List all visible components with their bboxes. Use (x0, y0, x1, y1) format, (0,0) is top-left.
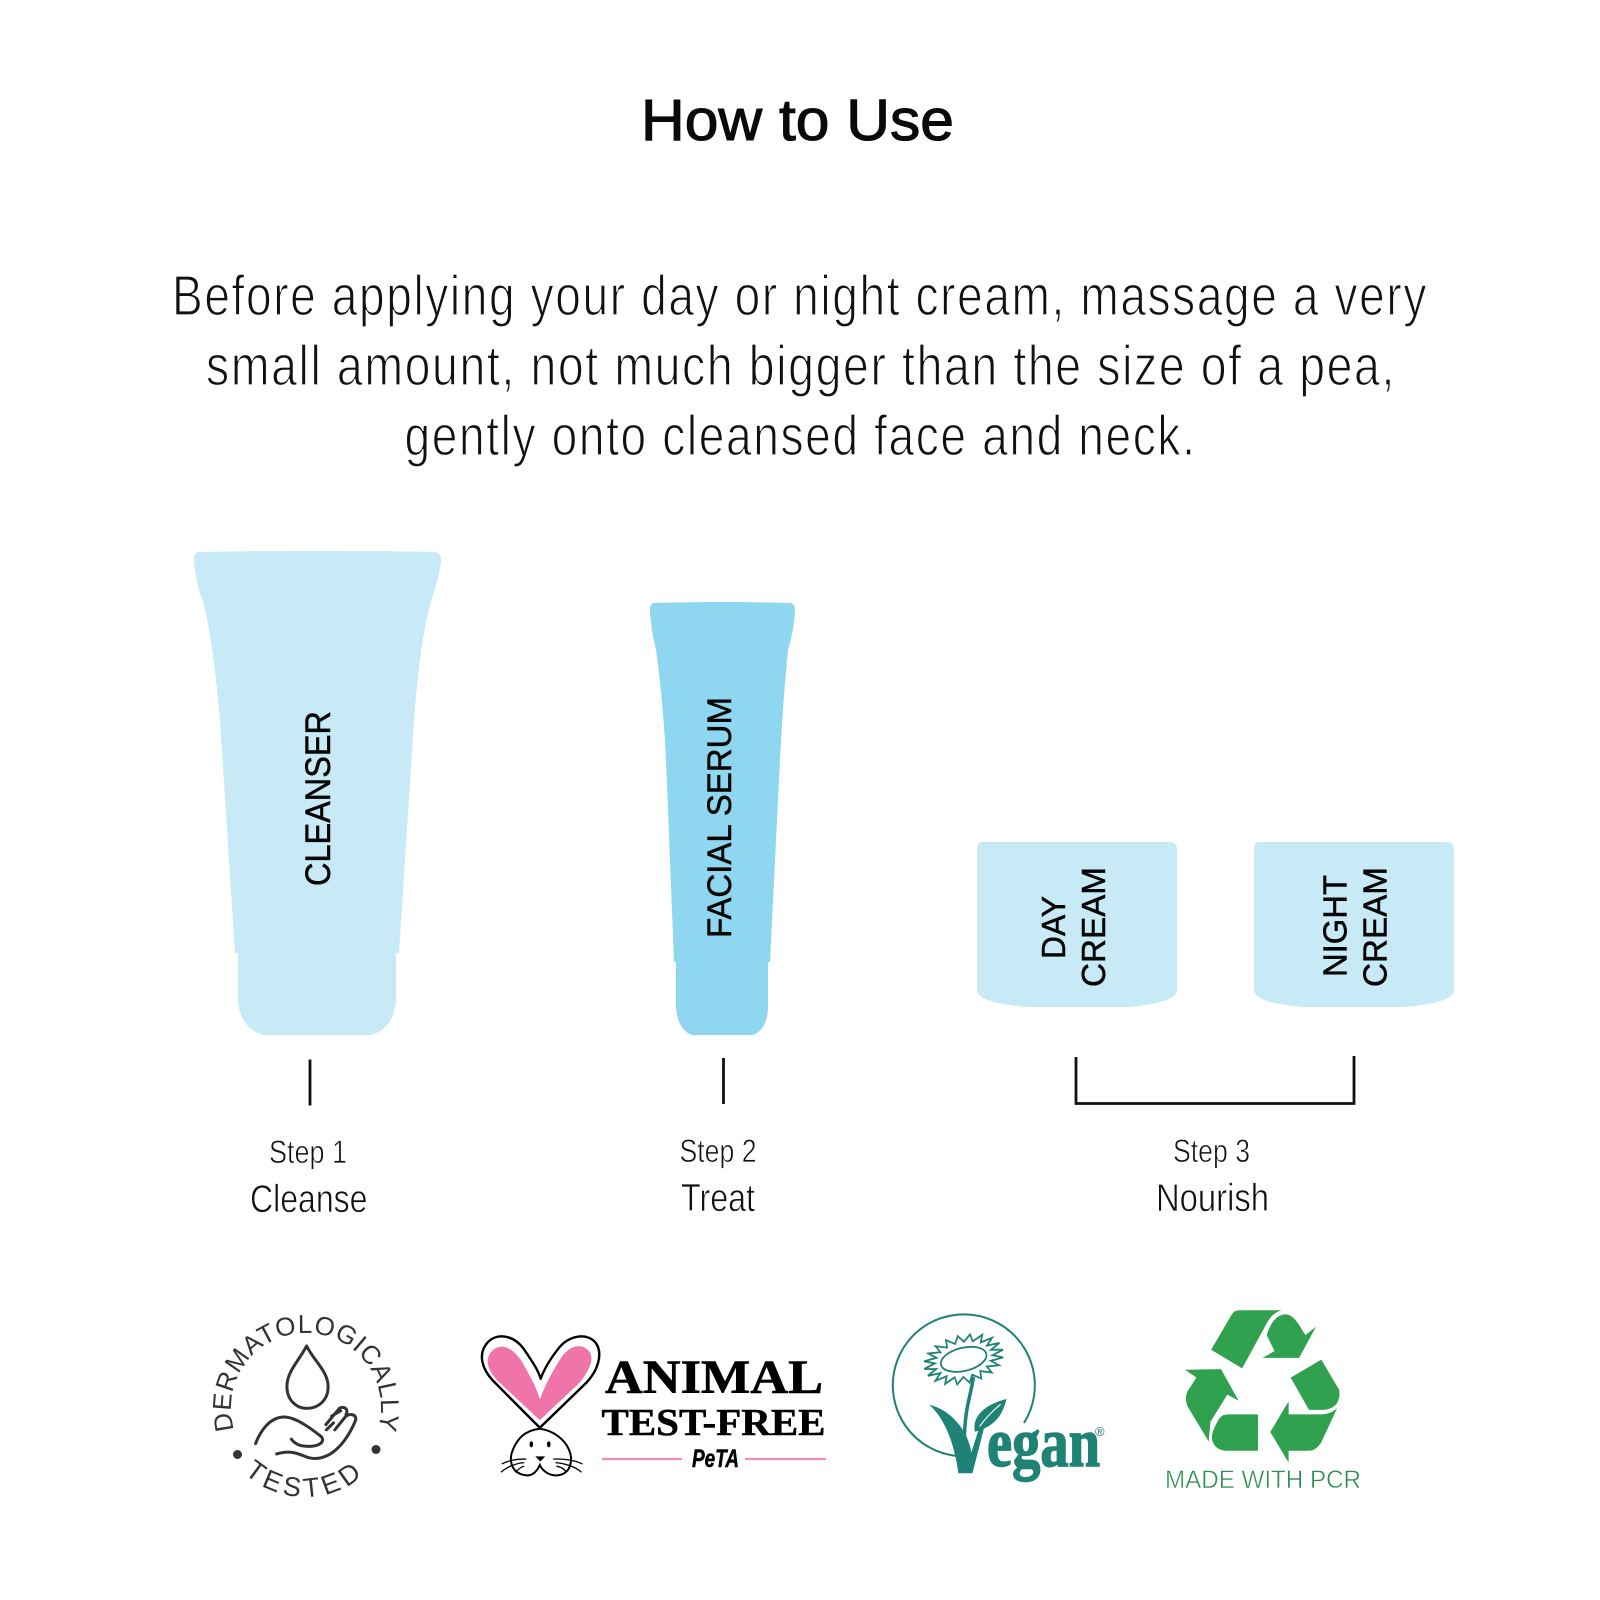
caption: step 1 cleanse: Cleanse (250, 1178, 368, 1221)
caption: step 1 cleanse (250, 1134, 368, 1221)
title: How to Use (641, 88, 954, 153)
ring text: dermatologically: DERMATOLOGICALLY (212, 1315, 399, 1432)
step 3: night cream jar (1254, 842, 1454, 1007)
caption: step 2 treat (680, 1133, 756, 1220)
connector: step 2 (722, 1058, 725, 1104)
step 2: facial serum tube (650, 602, 795, 1035)
caption: step 2 treat: Step 2 (680, 1133, 756, 1169)
label: day cream: DAY (1035, 896, 1072, 959)
caption: step 3 nourish (1156, 1133, 1269, 1220)
icon: bunny (482, 1336, 599, 1475)
caption: step 3 nourish: Nourish (1156, 1177, 1269, 1220)
logo: vegan (893, 1314, 1105, 1482)
dots (233, 1445, 380, 1459)
label: facial serum: FACIAL SERUM (701, 697, 739, 938)
step 3: day cream jar: CREAM (1075, 867, 1112, 987)
bracket: step 3 (1076, 1056, 1354, 1104)
icon: recycling arrows (1185, 1310, 1339, 1463)
label: cleanser: CLEANSER (299, 711, 338, 886)
logo: made with pcr (1165, 1310, 1361, 1494)
wordmark: test-free: TEST-FREE (602, 1402, 826, 1444)
caption: step 2 treat: Treat (681, 1177, 755, 1220)
icon: drop and hand (256, 1346, 356, 1459)
connector: step 1 (309, 1060, 311, 1106)
caption: step 3 nourish: Step 3 (1173, 1133, 1250, 1169)
intro text block (172, 264, 1428, 468)
caption: made with pcr: MADE WITH PCR (1165, 1466, 1361, 1494)
icon: sunflower (918, 1326, 1009, 1473)
wordmark: vegan: egan (987, 1405, 1100, 1482)
badge: dermatologically tested (212, 1315, 399, 1497)
label: night cream: NIGHT (1316, 875, 1354, 977)
circle outline (893, 1314, 1035, 1456)
wordmark: animal: ANIMAL (605, 1351, 823, 1404)
registered mark: ® (1095, 1424, 1105, 1439)
caption: step 1 cleanse: Step 1 (269, 1134, 347, 1170)
ring text: tested: TESTED (250, 1458, 358, 1497)
step 3: night cream jar: CREAM (1356, 867, 1394, 987)
step 3: day cream jar (977, 842, 1177, 1007)
logo: peta animal test-free (482, 1336, 826, 1475)
intro text block: gently onto cleansed face and neck. (404, 404, 1196, 468)
step 1: cleanser tube (194, 551, 441, 1035)
rule and peta mark: PeTA (692, 1445, 739, 1473)
